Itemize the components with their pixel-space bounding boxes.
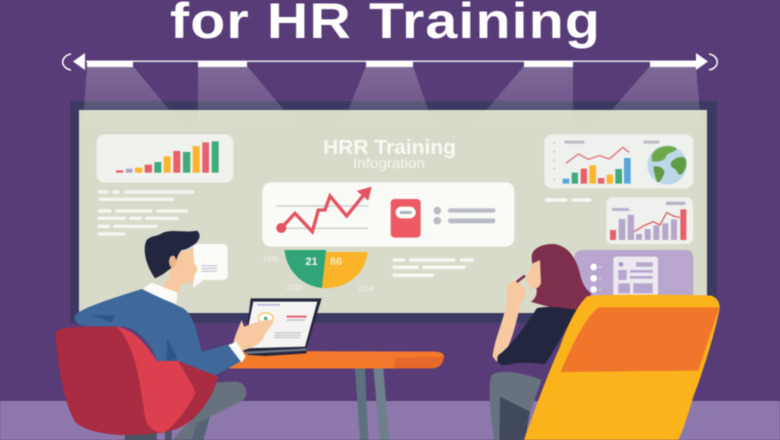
blue jumper — [75, 289, 243, 382]
yellow chair — [524, 295, 720, 440]
donut chart fragment: 21 — [305, 256, 318, 268]
dark top — [497, 307, 577, 365]
ceiling light beams — [82, 66, 702, 135]
trousers — [490, 372, 542, 440]
trousers — [173, 382, 247, 440]
ear — [169, 256, 176, 268]
hair — [531, 244, 592, 311]
neck and face — [163, 248, 198, 295]
table — [207, 351, 444, 440]
donut chart fragment: 2014 — [358, 286, 374, 293]
pen — [517, 276, 525, 282]
projection screen — [70, 101, 717, 323]
panel: purple form card — [574, 250, 693, 298]
red chair — [56, 327, 218, 435]
donut chart fragment — [263, 250, 374, 293]
speech bubble — [193, 244, 228, 288]
chair legs — [125, 430, 172, 440]
screen heading: HRR Training — [323, 137, 456, 159]
light rail — [63, 53, 717, 70]
centre text lines — [392, 258, 474, 277]
woman seated — [490, 244, 720, 440]
donut chart fragment: 2018 — [287, 285, 302, 292]
laptop — [244, 298, 322, 356]
small text lines right — [545, 198, 591, 202]
man on red chair — [56, 231, 322, 440]
hair — [145, 231, 200, 278]
screen subheading: Infogration — [353, 155, 425, 171]
panel: growth bar chart — [97, 134, 233, 183]
panel: mixed chart — [606, 197, 693, 244]
hand — [233, 320, 273, 352]
left text lines — [98, 190, 194, 236]
floor — [0, 401, 780, 440]
cuff — [228, 342, 246, 363]
collar — [143, 283, 177, 303]
panel: chart and globe — [544, 134, 693, 188]
icon: globe — [647, 145, 687, 185]
forearm and hand — [493, 280, 525, 362]
panel: centre trend card — [262, 182, 514, 247]
donut chart fragment: 1930 — [263, 256, 278, 263]
donut chart fragment: 86 — [330, 256, 342, 268]
face — [526, 260, 541, 289]
